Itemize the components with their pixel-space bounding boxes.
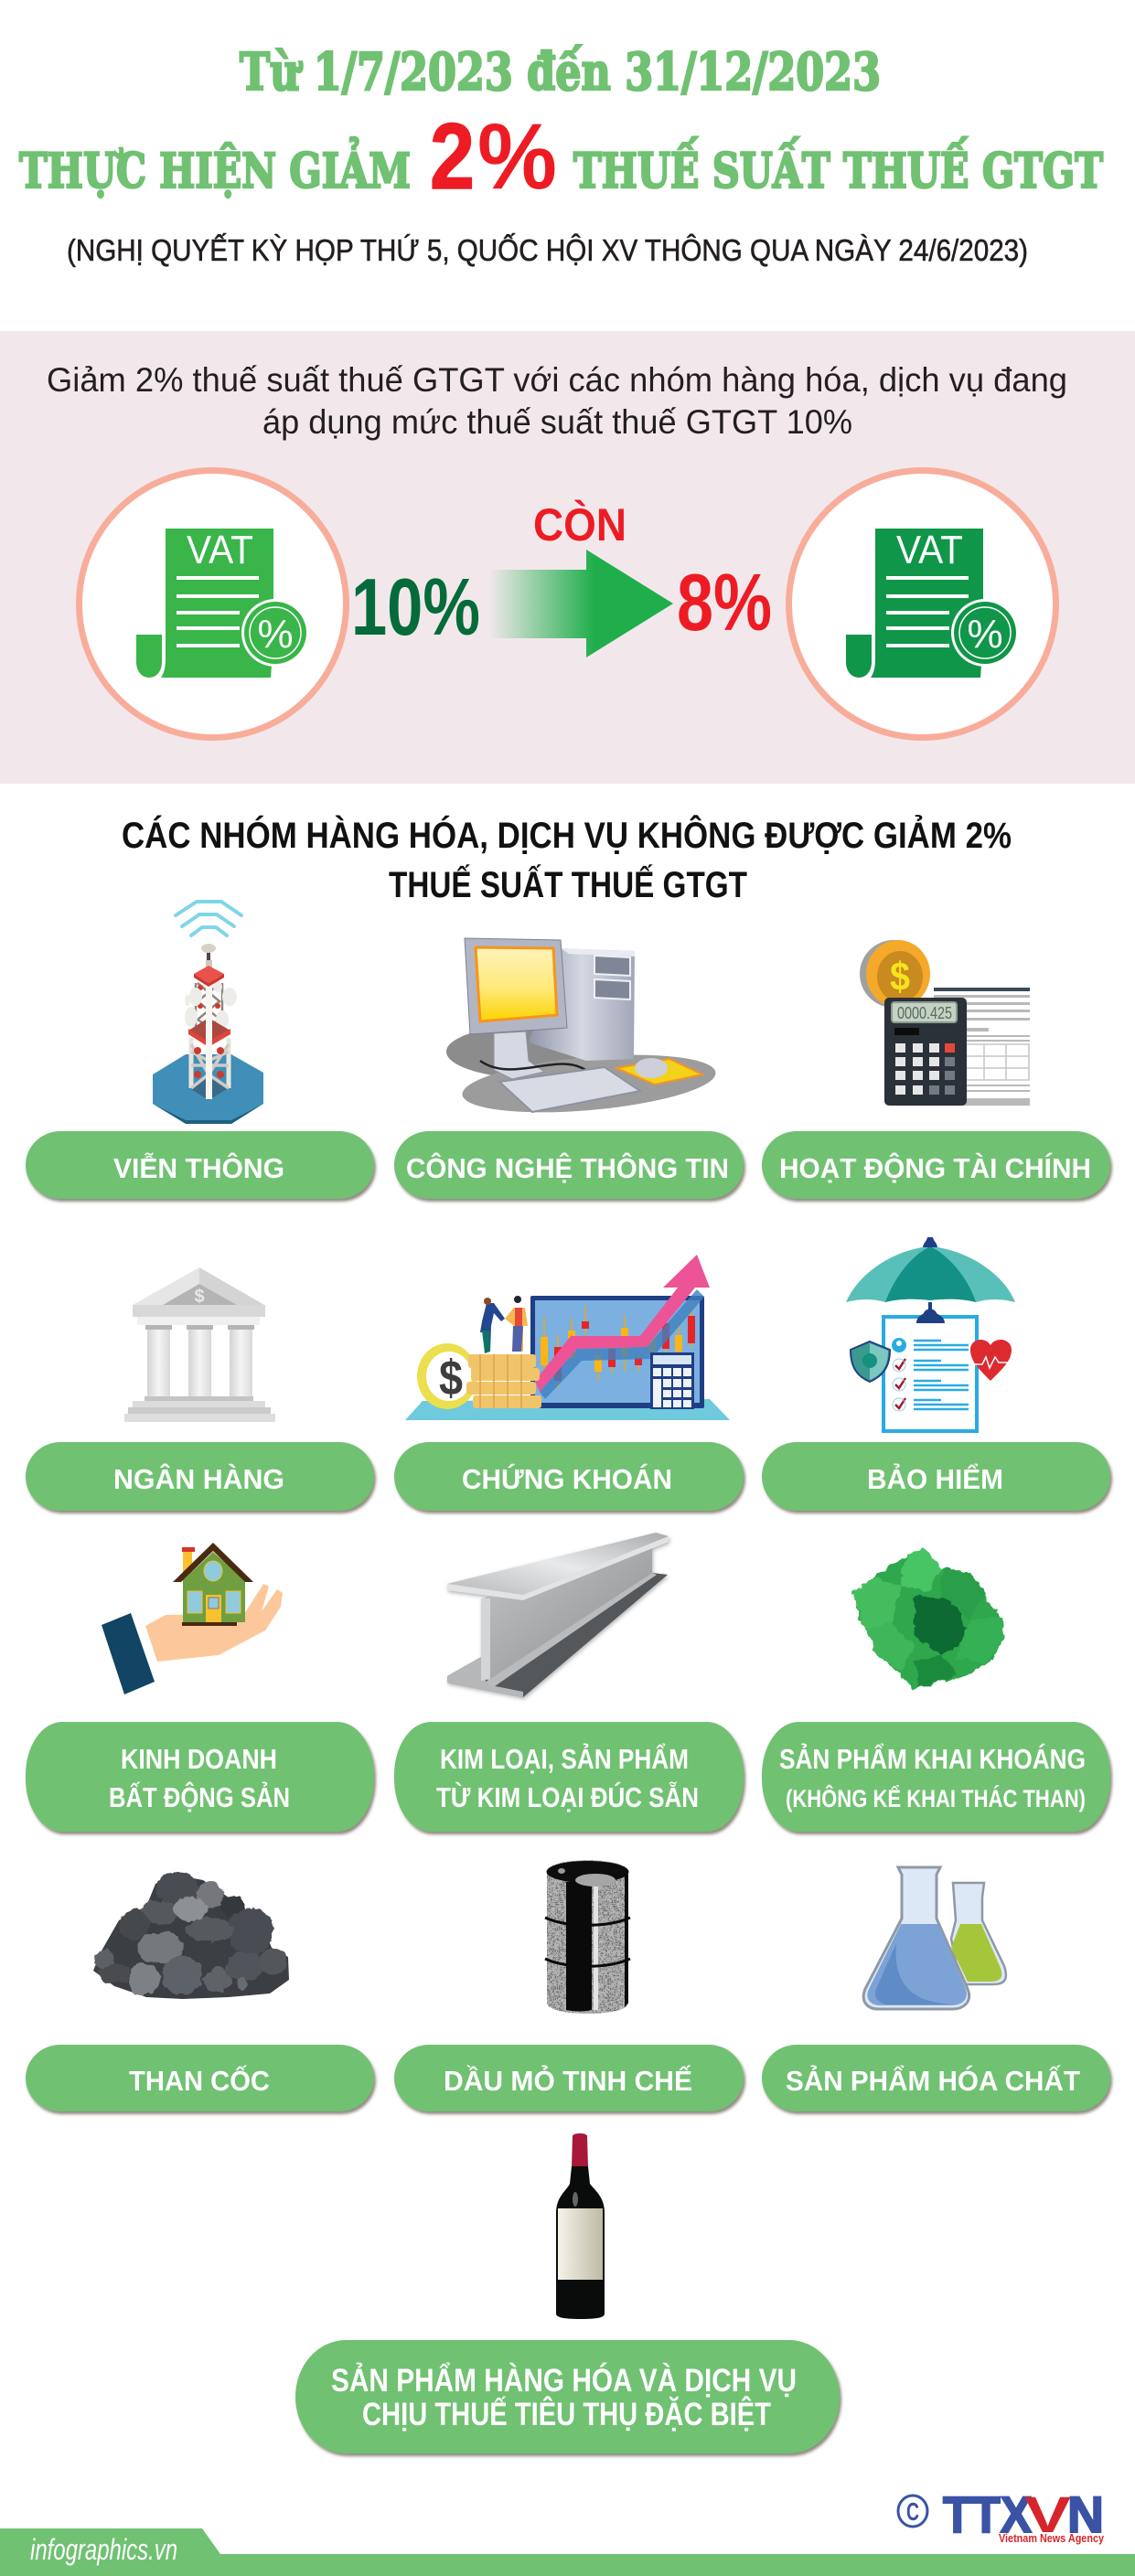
footer band xyxy=(0,2528,1135,2576)
pill: chứng khoán xyxy=(394,1442,744,1511)
panel intro text xyxy=(47,361,1067,441)
icon: VAT document 10%: VAT xyxy=(187,528,253,572)
heading: excluded groups: CÁC NHÓM HÀNG HÓA, DỊCH VỤ KHÔNG ĐƯỢC GIẢM 2% xyxy=(122,814,1012,856)
heading: excluded groups: THUẾ SUẤT THUẾ GTGT xyxy=(389,863,747,905)
panel: VAT reduction xyxy=(0,331,1135,784)
logo: TTXVN: C xyxy=(906,2497,919,2526)
arrow: reduces to xyxy=(488,550,673,657)
icon: bank xyxy=(124,1267,275,1422)
pill: bảo hiểm xyxy=(762,1442,1110,1511)
pill: bảo hiểm: BẢO HIỂM xyxy=(867,1463,1003,1495)
pill: viễn thông xyxy=(26,1131,374,1199)
pill: công nghệ thông tin xyxy=(394,1131,744,1199)
pill: viễn thông: VIỄN THÔNG xyxy=(113,1151,284,1184)
icon: VAT document 10% xyxy=(79,470,346,737)
icon: wine bottle xyxy=(556,2133,605,2319)
icon: telecom tower xyxy=(153,902,263,1124)
footer source: infographics.vn xyxy=(30,2533,177,2566)
icon: stock market: $ xyxy=(439,1351,463,1406)
pill: sản phẩm khai khoáng xyxy=(762,1722,1110,1832)
logo: TTXVN xyxy=(898,2485,1105,2545)
pill: kim loại: KIM LOẠI, SẢN PHẨM xyxy=(440,1743,689,1775)
pill: ngân hàng: NGÂN HÀNG xyxy=(113,1462,284,1495)
icon: steel I-beam xyxy=(447,1533,669,1697)
pill: sản phẩm chịu thuế tiêu thụ đặc biệt: CHỊU THUẾ TIÊU THỤ ĐẶC BIỆT xyxy=(362,2396,771,2432)
pill: công nghệ thông tin: CÔNG NGHỆ THÔNG TIN xyxy=(406,1151,729,1184)
icon: oil barrel xyxy=(545,1860,630,2014)
pill: sản phẩm chịu thuế tiêu thụ đặc biệt: SẢN PHẨM HÀNG HÓA VÀ DỊCH VỤ xyxy=(331,2362,797,2399)
label: còn: CÒN xyxy=(533,499,626,550)
icon: calculator and coin: $ xyxy=(890,955,910,999)
pill: kinh doanh bất động sản: KINH DOANH xyxy=(121,1743,277,1775)
title: main headline: THỰC HIỆN GIẢM xyxy=(19,137,411,199)
panel intro text: Giảm 2% thuế suất thuế GTGT với các nhóm hàng hóa, dịch vụ đang xyxy=(47,361,1067,399)
pill: sản phẩm chịu thuế tiêu thụ đặc biệt xyxy=(295,2340,840,2453)
pill: chứng khoán: CHỨNG KHOÁN xyxy=(462,1462,672,1495)
pill: dầu mỏ tinh chế xyxy=(394,2045,744,2111)
pill: kim loại: TỪ KIM LOẠI ĐÚC SẴN xyxy=(436,1780,699,1813)
title: main headline xyxy=(19,104,1103,208)
pill: sản phẩm hóa chất: SẢN PHẨM HÓA CHẤT xyxy=(786,2064,1080,2097)
pill: kinh doanh bất động sản: BẤT ĐỘNG SẢN xyxy=(109,1780,290,1813)
pill: kinh doanh bất động sản xyxy=(26,1722,374,1832)
icon: bank: $ xyxy=(194,1287,205,1307)
logo: TTXVN: Vietnam News Agency xyxy=(999,2531,1105,2545)
pill: hoạt động tài chính xyxy=(762,1131,1110,1199)
pill: dầu mỏ tinh chế: DẦU MỎ TINH CHẾ xyxy=(444,2064,692,2097)
pill: kim loại xyxy=(394,1722,744,1832)
logo: TTXVN: V xyxy=(1024,2485,1071,2543)
icon: VAT document 8%: % xyxy=(967,612,1003,657)
title: main headline: 2 xyxy=(430,104,475,208)
icon: calculator and coin xyxy=(860,940,1030,1106)
value: 10%: 10% xyxy=(351,561,480,652)
icon: calculator and coin: 0000.425 xyxy=(897,1004,952,1022)
title: date range: Từ 1/7/2023 đến 31/12/2023 xyxy=(240,42,881,102)
icon: house in hand xyxy=(102,1543,283,1694)
pill: ngân hàng xyxy=(26,1442,374,1511)
pill: sản phẩm khai khoáng: SẢN PHẨM KHAI KHOÁNG xyxy=(779,1743,1086,1775)
icon: VAT document 10%: % xyxy=(257,612,294,657)
icon: VAT document 8% xyxy=(788,470,1055,737)
pill: than cốc: THAN CỐC xyxy=(129,2064,270,2097)
icon: insurance xyxy=(846,1237,1015,1431)
heading: excluded groups xyxy=(122,814,1012,905)
icon: stock market xyxy=(405,1255,730,1420)
panel intro text: áp dụng mức thuế suất thuế GTGT 10% xyxy=(262,403,852,441)
title: main headline: % xyxy=(477,104,557,208)
icon: green mineral xyxy=(852,1548,1004,1690)
icon: VAT document 8%: VAT xyxy=(896,528,963,572)
value: 8%: 8% xyxy=(677,557,772,647)
pill: than cốc xyxy=(26,2045,374,2111)
logo: TTXVN: TTX xyxy=(943,2485,1032,2543)
icon: computer xyxy=(446,938,718,1121)
subtitle: resolution: (NGHỊ QUYẾT KỲ HỌP THỨ 5, QUỐC HỘI XV THÔNG QUA NGÀY 24/6/2023) xyxy=(67,232,1028,267)
icon: coke coal xyxy=(93,1872,289,1999)
logo: TTXVN: N xyxy=(1067,2485,1104,2543)
icon: chemistry flasks xyxy=(863,1867,1006,2009)
pill: hoạt động tài chính: HOẠT ĐỘNG TÀI CHÍNH xyxy=(779,1151,1091,1184)
pill: sản phẩm hóa chất xyxy=(762,2045,1110,2111)
